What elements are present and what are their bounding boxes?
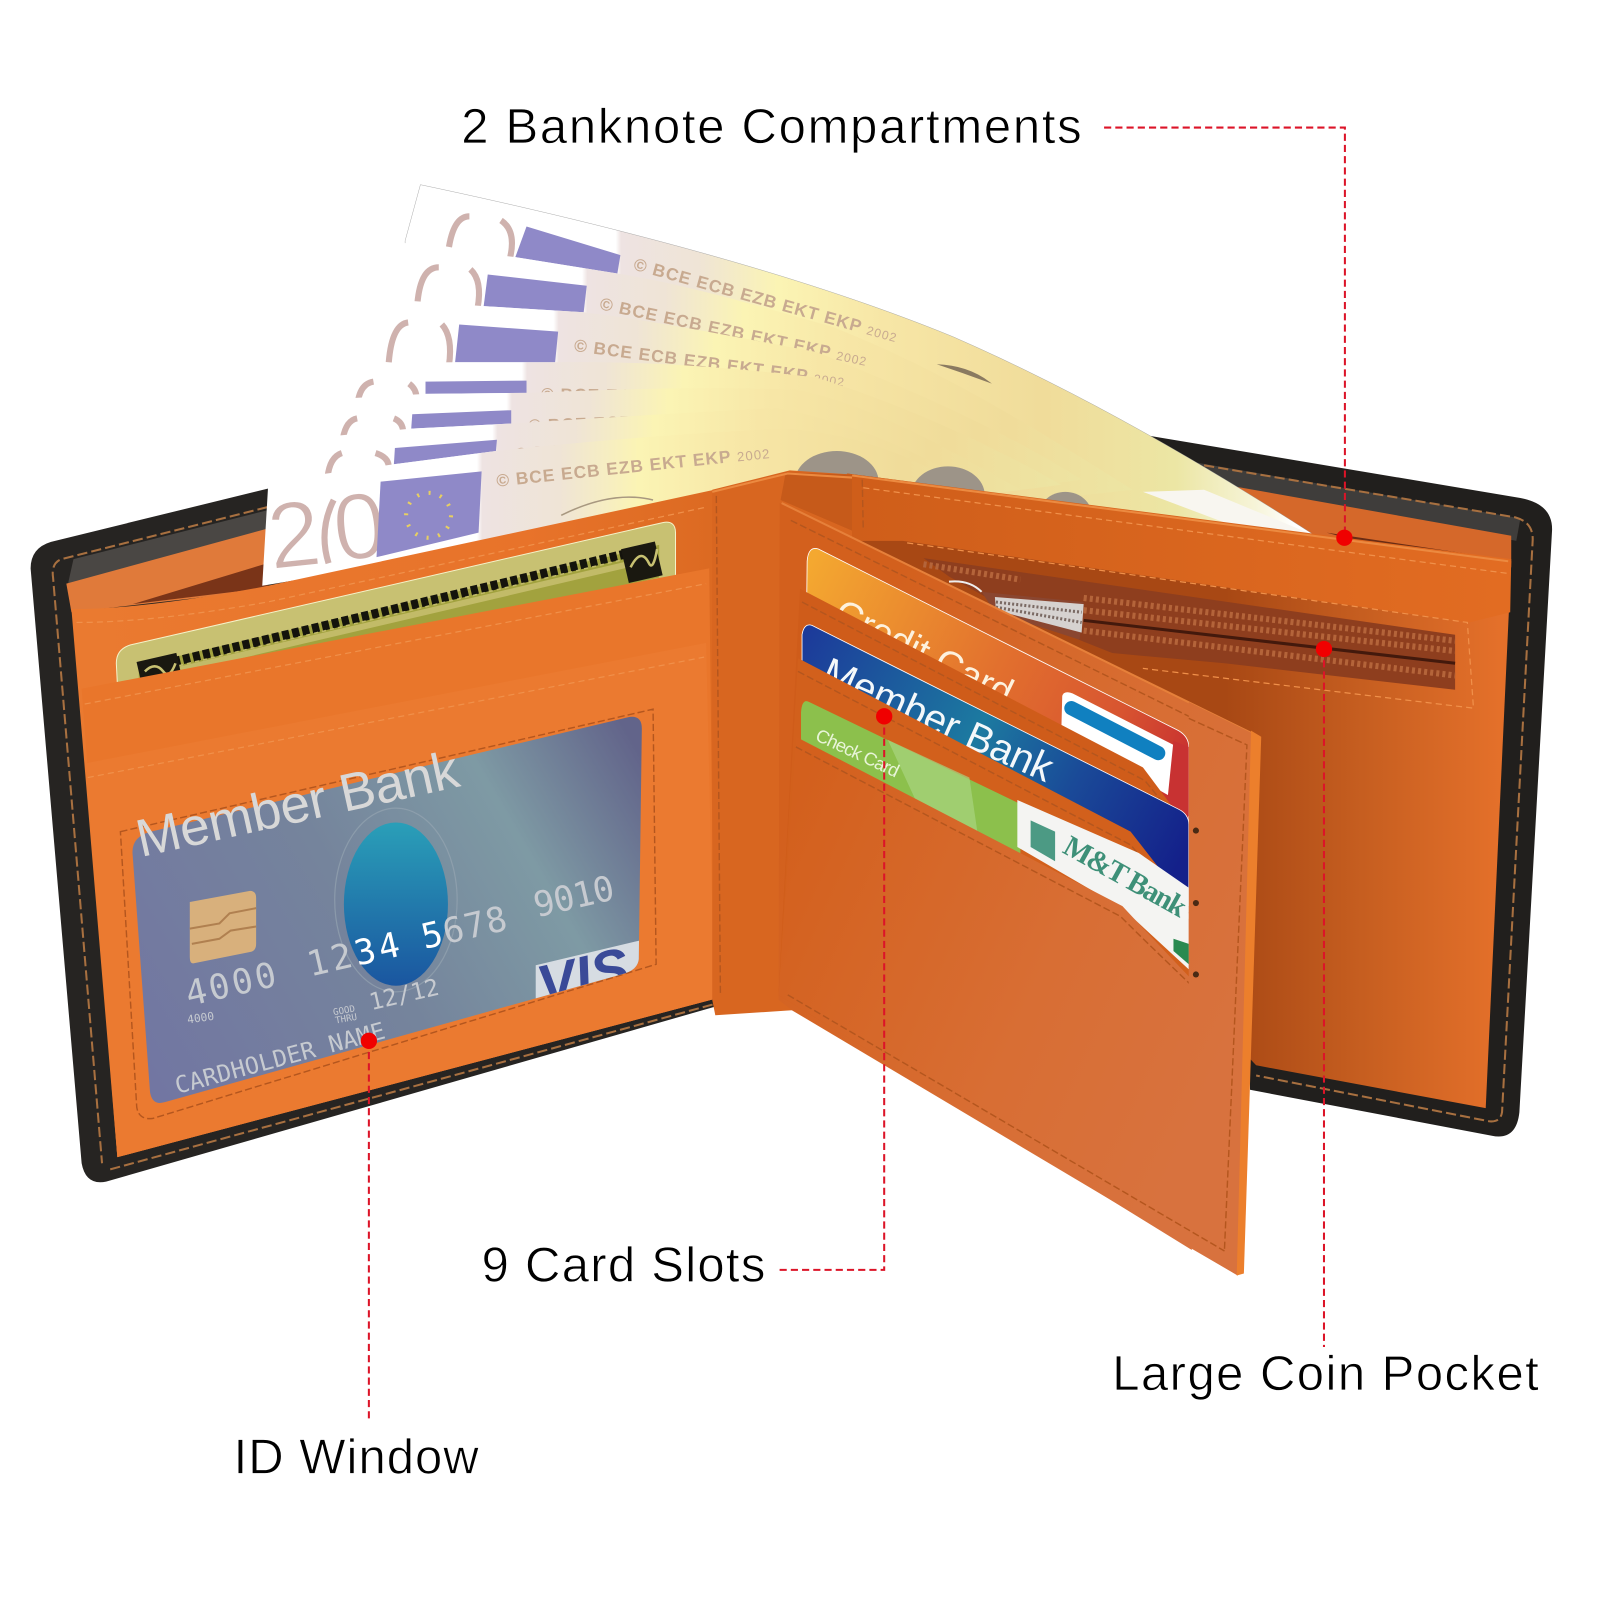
marker: [1336, 530, 1353, 546]
note 4: © BCE ECB EZB EKT EKP: [541, 384, 777, 408]
note 5: [293, 388, 1020, 582]
window stitching: [120, 709, 656, 1119]
zipper tape: [923, 558, 1455, 690]
VISA logo: [536, 940, 639, 998]
second pocket: [82, 568, 714, 1157]
card small text: GOOD: [332, 1004, 356, 1018]
chip: [190, 891, 256, 963]
note 1: © BCE ECB EZB EKT EKP 2002: [632, 254, 900, 346]
callout: card slots: [482, 708, 892, 1293]
VISA logo: VISA: [531, 926, 676, 1019]
marker: [1316, 641, 1332, 657]
euro star ring: [406, 493, 451, 538]
note 7 with euro stars: © BCE ECB EZB EKT EKP 2002: [495, 442, 771, 491]
central spine: [712, 470, 1020, 1015]
banknote white edge: [1143, 490, 1315, 536]
banknotes fan: [262, 185, 1315, 589]
gusset slot: left: [66, 529, 267, 612]
label: 9 Card Slots: [482, 1239, 765, 1293]
second card slot pocket: [779, 658, 1189, 1247]
card number: 4000: [182, 955, 280, 1015]
zipper stitching frame: [907, 543, 1473, 708]
flap orange edge: [1237, 731, 1261, 1276]
note 6: © BCE ECB EZB EKT EKP: [514, 428, 751, 464]
panel leather: [847, 473, 1511, 1108]
left panel base: [71, 490, 714, 1157]
note 2: [373, 241, 1133, 571]
ID window with card: [131, 717, 676, 1103]
front card slot pocket: [779, 737, 1192, 1250]
label: Large Coin Pocket: [1112, 1347, 1539, 1401]
inner grey edge and stitching: right: [1189, 461, 1533, 1121]
label: ID Window: [234, 1430, 479, 1484]
check card: [801, 701, 1193, 969]
hologram: [335, 808, 457, 992]
check card: Check Card: [813, 724, 903, 781]
wallet: [31, 434, 1552, 1182]
card number: [182, 869, 618, 1015]
note 7 with euro stars: [262, 429, 949, 589]
window pocket: [86, 643, 714, 1157]
card small text: 4000: [186, 1010, 215, 1026]
callout: coin pocket: [1112, 641, 1539, 1401]
callout: ID window: [234, 1033, 479, 1484]
member bank card: Member Bank: [816, 650, 1060, 791]
slot holes: [1193, 828, 1199, 978]
credit card: Credit Card: [828, 591, 1020, 713]
card number: 9010: [530, 869, 618, 926]
right panel: zip pocket: [847, 473, 1511, 1108]
label: 2 Banknote Compartments: [461, 100, 1082, 154]
card small text: 12/12: [366, 973, 442, 1016]
check card: M&T Bank: [1058, 830, 1193, 924]
note 5: © BCE ECB EZB EKT EKP: [528, 407, 765, 436]
note 4: [311, 362, 1061, 582]
card corner ornaments: [137, 541, 663, 690]
marker: [876, 708, 892, 724]
note 2: © BCE ECB EZB EKT EKP 2002: [598, 294, 870, 370]
note 7 with euro stars: 2: [263, 479, 325, 589]
credit card: [806, 548, 1189, 847]
note 3: © BCE ECB EZB EKT EKP 2002: [573, 335, 846, 391]
card small text: [172, 973, 442, 1100]
card small text: THRU: [334, 1012, 358, 1026]
card number: 1234: [303, 925, 404, 985]
card number: 5678: [418, 899, 511, 958]
gusset slot: right: [1231, 486, 1511, 567]
credit card logo: [1061, 692, 1173, 796]
member bank card: [802, 625, 1189, 918]
flap base: [779, 503, 1259, 1276]
card small text: CARDHOLDER NAME: [172, 1017, 388, 1100]
callout: banknote compartments: [461, 100, 1353, 546]
note 3: [343, 297, 1082, 582]
dark leather cover: left half: [31, 469, 720, 1182]
dark leather cover: right half: [1137, 434, 1552, 1136]
zipper pull: [949, 581, 1084, 640]
folding card flap: [779, 503, 1261, 1276]
inner grey edge and stitching: left: [53, 507, 714, 1169]
card title: Member Bank: [131, 740, 465, 869]
note 7 with euro stars: 0: [328, 471, 391, 581]
first card slot pocket: [779, 589, 1189, 1247]
note 1: [405, 185, 1315, 571]
upper strip: [847, 473, 1511, 622]
flap right column: [1189, 702, 1259, 1276]
left panel: card pockets and ID window: [71, 490, 714, 1157]
M&T logo: [1031, 820, 1055, 861]
coins on the banknote: [795, 451, 1092, 539]
note 6: [278, 408, 980, 582]
gold card: [116, 522, 676, 704]
marker: [361, 1033, 377, 1049]
